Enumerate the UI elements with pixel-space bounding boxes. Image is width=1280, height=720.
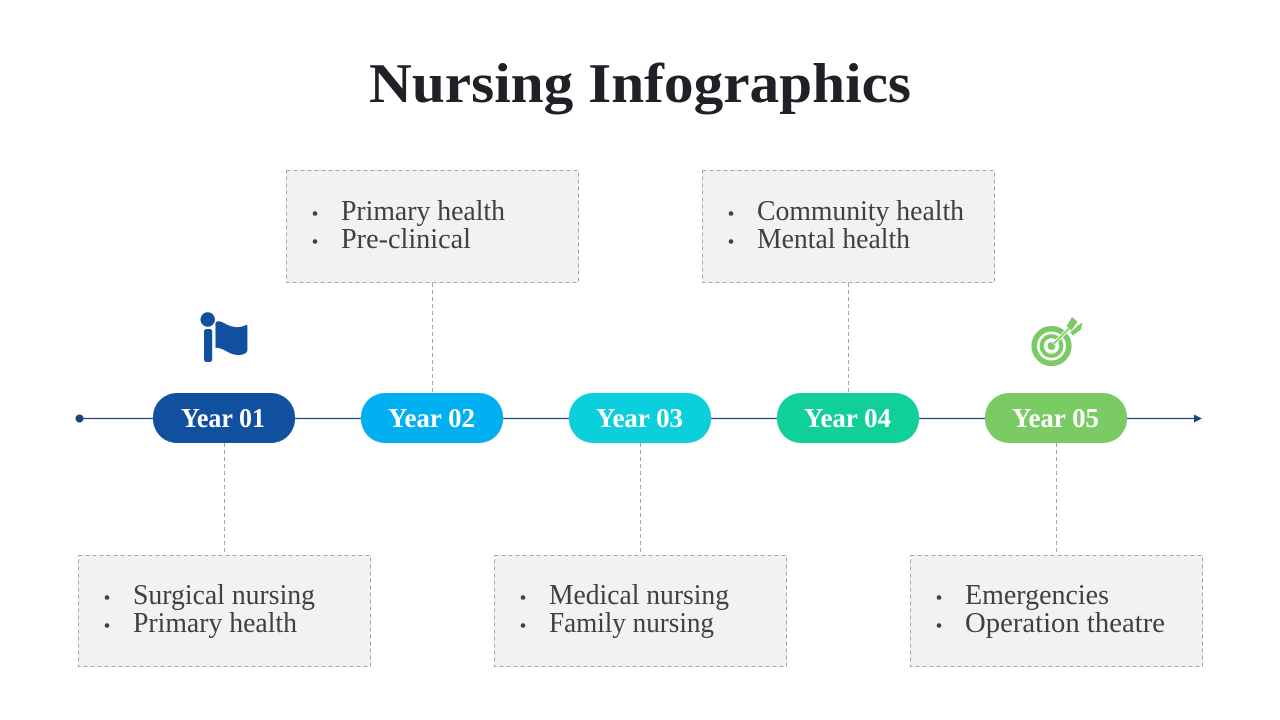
panel: year 03 details: Family nursing bbox=[549, 608, 714, 639]
panel: year 02 details bbox=[286, 170, 578, 282]
panel: year 01 details bbox=[78, 556, 370, 666]
panel: year 04 details bbox=[702, 170, 994, 282]
panel: year 02 details: Primary health bbox=[341, 196, 505, 227]
icon: target with dart bbox=[1034, 317, 1082, 363]
panel: year 01 details: Surgical nursing bbox=[133, 580, 315, 611]
connector: year 01 bbox=[224, 443, 226, 555]
pill: Year 02: Year 02 bbox=[388, 403, 475, 433]
pill: Year 05: Year 05 bbox=[1012, 403, 1099, 433]
panel: year 02 details: Pre-clinical bbox=[341, 224, 471, 255]
timeline axis with arrow bbox=[76, 414, 1202, 422]
panel: year 03 details: Medical nursing bbox=[549, 580, 729, 611]
panel: year 04 details: Community health bbox=[757, 196, 964, 227]
panel: year 05 details: Operation theatre bbox=[965, 608, 1165, 639]
panel: year 01 details: Primary health bbox=[133, 608, 297, 639]
pill: Year 04 bbox=[777, 393, 919, 443]
pill: Year 02 bbox=[361, 393, 503, 443]
panel: year 05 details bbox=[910, 556, 1202, 666]
connector: year 05 bbox=[1056, 443, 1058, 555]
panel: year 04 details: Mental health bbox=[757, 224, 910, 255]
pill: Year 01: Year 01 bbox=[181, 403, 265, 433]
pill: Year 03 bbox=[569, 393, 711, 443]
pill: Year 04: Year 04 bbox=[804, 403, 891, 433]
pill: Year 01 bbox=[153, 393, 295, 443]
panel: year 03 details bbox=[494, 556, 786, 666]
connector: year 02 bbox=[432, 283, 434, 393]
icon: flag bbox=[200, 312, 247, 362]
connector: year 04 bbox=[848, 283, 850, 393]
pill: Year 05 bbox=[985, 393, 1127, 443]
pill: Year 03: Year 03 bbox=[596, 403, 683, 433]
panel: year 05 details: Emergencies bbox=[965, 580, 1109, 611]
connector: year 03 bbox=[640, 443, 642, 555]
title: Nursing Infographics bbox=[369, 53, 911, 115]
